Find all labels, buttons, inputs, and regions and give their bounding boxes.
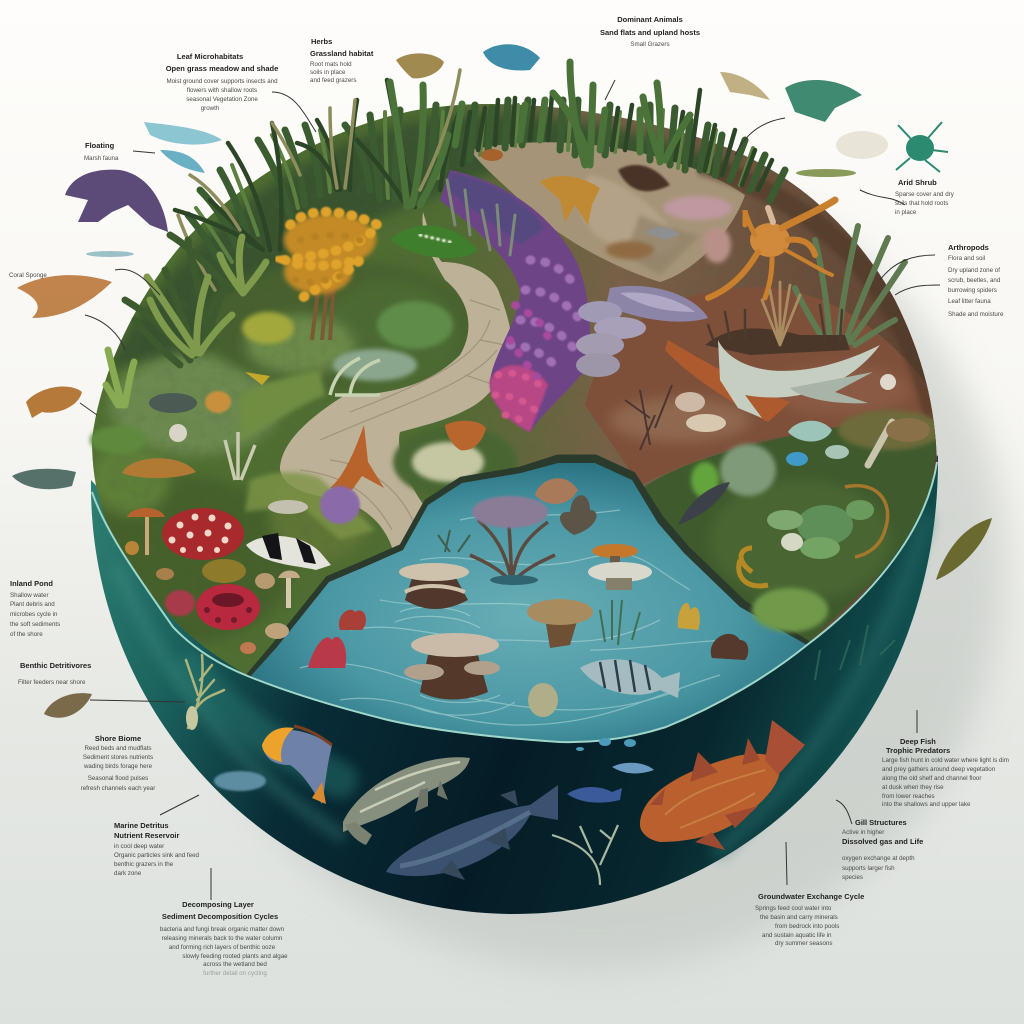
label: left middle: [10, 579, 60, 638]
specimen: blue fish top: [483, 44, 540, 70]
pool: tan anemone and fern: [535, 478, 597, 535]
dried stems: [625, 385, 672, 450]
label: lower right one: into the shallows and upper lake: [882, 801, 971, 808]
deep water basin: [91, 455, 938, 914]
sandy trail: [280, 212, 512, 558]
label: bottom right: the basin and carry minerals: [760, 914, 838, 921]
label: bottom left small: Benthic Detritivores: [20, 661, 91, 670]
label: top left: growth: [201, 105, 220, 112]
label: lower left: Nutrient Reservoir: [114, 831, 180, 840]
label: bottom right: dry summer seasons: [775, 940, 832, 947]
specimen: shell left: [44, 693, 92, 718]
label: bottom: Decomposing Layer: [182, 900, 254, 909]
label: right reeds: Arthropods: [948, 243, 989, 252]
label: right reeds: Dry upland zone of: [948, 267, 1000, 274]
dark blades: [175, 80, 772, 250]
pool water: [250, 463, 807, 742]
label: bottom left small: [18, 661, 91, 686]
dark scrub fringe: [700, 165, 935, 425]
floating specimens: [12, 44, 992, 718]
pool: egg: [528, 683, 558, 717]
label: bottom left small: Filter feeders near shore: [18, 679, 86, 686]
left fan: [125, 235, 230, 365]
label: top right: Sand flats and upland hosts: [600, 28, 700, 37]
specimen: orange fish left: [26, 387, 82, 418]
label: lower right one: and prey gathers around deep vegetation: [882, 766, 996, 773]
label: bottom: further detail on cycling: [203, 970, 267, 977]
trunk: [298, 240, 352, 340]
green leaf: [390, 225, 478, 258]
specimen: olive fish right: [936, 518, 992, 580]
orange fish: [640, 720, 805, 850]
tree: [284, 212, 378, 340]
label: bottom: Sediment Decomposition Cycles: [162, 912, 278, 921]
label: top right: Small Grazers: [630, 41, 670, 48]
orange coral strip: [665, 340, 790, 422]
label: top right: Dominant Animals: [617, 15, 683, 24]
label: lower right one: [882, 737, 1009, 808]
label: lower left: Organic particles sink and feed: [114, 852, 200, 859]
pool back wall: [250, 459, 807, 677]
label: bottom right: [755, 892, 864, 947]
ecosystem disc: [65, 62, 950, 914]
central bush: [390, 430, 518, 494]
purple flowers by path: [320, 486, 360, 524]
orange starfish: [330, 425, 384, 490]
stones and shells: [675, 374, 930, 466]
label: right reeds: [948, 243, 1004, 318]
dark spiky scrub: [705, 305, 850, 355]
label: top centre: Root mats hold: [310, 61, 352, 68]
label: top centre: Herbs: [311, 37, 332, 46]
label: lower right two: Gill Structures: [855, 818, 907, 827]
purple flower column: [440, 170, 590, 432]
branching coral: [552, 825, 618, 885]
label: right reeds: burrowing spiders: [948, 287, 997, 294]
red earth: [585, 287, 935, 485]
faint water weeds: [815, 625, 895, 680]
label: lower right two: Active in higher: [842, 829, 884, 836]
upper sand field: [470, 142, 745, 282]
label: lower right one: Trophic Predators: [886, 746, 950, 755]
label: bottom: releasing minerals back to the water column: [162, 935, 283, 942]
left pond stones: [149, 372, 270, 442]
label: top right: [600, 15, 700, 48]
label: bottom left: Seasonal flood pulses: [88, 775, 148, 782]
label: left coral: Coral Sponge: [9, 272, 47, 279]
pool: coral tree: [470, 496, 555, 585]
label: lower right one: at dusk when they rise: [882, 784, 944, 791]
mottled land texture: [170, 118, 790, 373]
label: left middle: Plant debris and: [10, 601, 55, 608]
specimen: orange coral: [17, 275, 112, 318]
label: bottom: [160, 900, 288, 977]
crimson mushroom: [196, 584, 260, 630]
rim highlight: [92, 462, 937, 742]
pool: mushroom cluster one: [399, 563, 469, 609]
label: right upper: soils that hold roots: [895, 200, 948, 207]
label: fin: Floating: [85, 141, 115, 150]
label: bottom: and forming rich layers of benthic ooze: [169, 944, 276, 951]
right reeds: [795, 226, 905, 345]
right lower meadow: [640, 420, 940, 645]
label: top left: [166, 52, 278, 112]
label: right upper: in place: [895, 209, 917, 216]
small mushrooms and pebbles: [125, 500, 308, 654]
label: right upper: Arid Shrub: [898, 178, 937, 187]
label: lower right two: supports larger fish: [842, 865, 895, 872]
label: bottom: slowly feeding rooted plants and algae: [182, 953, 288, 960]
label: lower left: Marine Detritus: [114, 821, 169, 830]
label: top left: flowers with shallow roots: [187, 87, 257, 94]
grey spotted fish: [343, 757, 470, 845]
label: right reeds: Leaf litter fauna: [948, 298, 991, 305]
land surface: [65, 90, 950, 690]
label: lower right two: [842, 818, 923, 881]
pool: large mushroom cluster: [404, 633, 500, 700]
grass-band shade: [105, 114, 735, 370]
foliage: [284, 212, 378, 300]
label: bottom: bacteria and fungi break organic matter down: [160, 926, 285, 933]
label: bottom left: wading birds forage here: [83, 763, 153, 770]
terracotta pot: [445, 421, 486, 450]
grass crown: [106, 62, 785, 405]
specimen: small blue fish: [86, 251, 134, 257]
specimen: tan fish top: [396, 53, 444, 78]
callout lines: [80, 80, 940, 900]
sand creatures: [481, 149, 732, 263]
label: right reeds: Flora and soil: [948, 255, 985, 262]
brown log: [122, 458, 196, 478]
pool: small corals: [308, 530, 748, 668]
label: top centre: Grassland habitat: [310, 49, 374, 58]
label: top left: Moist ground cover supports insects and: [166, 78, 278, 85]
label: left middle: microbes cycle in: [10, 611, 58, 618]
label: lower right one: from lower reaches: [882, 793, 935, 800]
mid green blades: [390, 62, 690, 207]
label: bottom: across the wetland bed: [203, 961, 267, 968]
label: left middle: Shallow water: [10, 592, 49, 599]
green shrubs: [90, 301, 453, 540]
label: lower right one: Deep Fish: [900, 737, 936, 746]
label: lower right two: oxygen exchange at depth: [842, 855, 915, 862]
label: fin: Marsh fauna: [84, 155, 119, 162]
label: bottom left: refresh channels each year: [81, 785, 155, 792]
specimen: teal flying fish: [144, 122, 222, 145]
specimen: purple creature: [65, 170, 168, 232]
red spotted mushroom: [162, 508, 244, 560]
label: bottom right: Springs feed cool water into: [755, 905, 832, 912]
label: top centre: and feed grazers: [310, 77, 356, 84]
small side fan: [106, 350, 134, 405]
pool: striped fish: [580, 659, 680, 698]
label: bottom left: Sediment stores nutrients: [83, 754, 153, 761]
label: bottom right: and sustain aquatic life in: [762, 932, 832, 939]
label: left middle: Inland Pond: [10, 579, 53, 588]
label: lower right one: Large fish hunt in cold water where light is dim: [882, 757, 1009, 764]
label: left middle: the soft sediments: [10, 621, 60, 628]
bone: [718, 340, 880, 418]
label: right upper: [895, 178, 955, 216]
specimen: green bug: [896, 122, 948, 172]
label: fin: [84, 141, 119, 162]
label: top centre: [310, 37, 374, 84]
olive blades: [178, 70, 460, 290]
specimen: pale insect: [836, 131, 888, 159]
label: lower left: benthic grazers in the: [114, 861, 174, 868]
label: lower right one: along the old shelf and channel floor: [882, 775, 981, 782]
pool ripples: [300, 510, 740, 725]
dry coral: [762, 282, 800, 345]
label: top left: Open grass meadow and shade: [166, 64, 278, 73]
specimen: green fish left: [12, 469, 76, 489]
grey-green shrubs right: [678, 444, 828, 632]
specimen: slim fish: [796, 169, 856, 177]
striped fish on land: [246, 533, 331, 570]
left meadow shades: [65, 260, 475, 645]
label: top left: seasonal Vegetation Zone: [186, 96, 258, 103]
label: top left: Leaf Microhabitats: [177, 52, 243, 61]
label: bottom left: [81, 734, 155, 792]
label: left middle: of the shore: [10, 631, 43, 638]
label: lower left: dark zone: [114, 870, 142, 877]
filler blades: [188, 100, 785, 270]
specimen: teal fin: [160, 150, 205, 173]
label: right reeds: scrub, beetles, and: [948, 277, 1001, 284]
pool: orange capped mushrooms: [588, 544, 652, 590]
label: right reeds: Shade and moisture: [948, 311, 1004, 318]
label: bottom left: Reed beds and mudflats: [84, 745, 152, 752]
blue fish: [386, 785, 558, 880]
basin light bands: [118, 520, 925, 850]
orange crab: [708, 200, 835, 298]
lily pads: [739, 486, 888, 586]
basin drop shadow: [175, 160, 1005, 970]
label: lower left: in cool deep water: [114, 843, 164, 850]
label: bottom left: Shore Biome: [95, 734, 141, 743]
underwater plant: [186, 655, 224, 730]
pool: sponge cluster: [527, 599, 593, 648]
tiger fish: [262, 726, 332, 804]
label: right upper: Sparse cover and dry: [895, 191, 955, 198]
lavender rock stack: [576, 286, 708, 377]
specimen: tan lizard: [720, 72, 770, 100]
label: bottom right: Groundwater Exchange Cycle: [758, 892, 864, 901]
label: lower right two: species: [842, 874, 863, 881]
label: lower right two: Dissolved gas and Life: [842, 837, 923, 846]
label: lower left: [114, 821, 200, 877]
label: top centre: soils in place: [310, 69, 346, 76]
blue coral clump: [214, 771, 266, 791]
land base: [80, 90, 950, 690]
small fishes: [567, 738, 654, 803]
specimen: green lizard: [785, 80, 862, 122]
label: bottom right: from bedrock into pools: [775, 923, 839, 930]
